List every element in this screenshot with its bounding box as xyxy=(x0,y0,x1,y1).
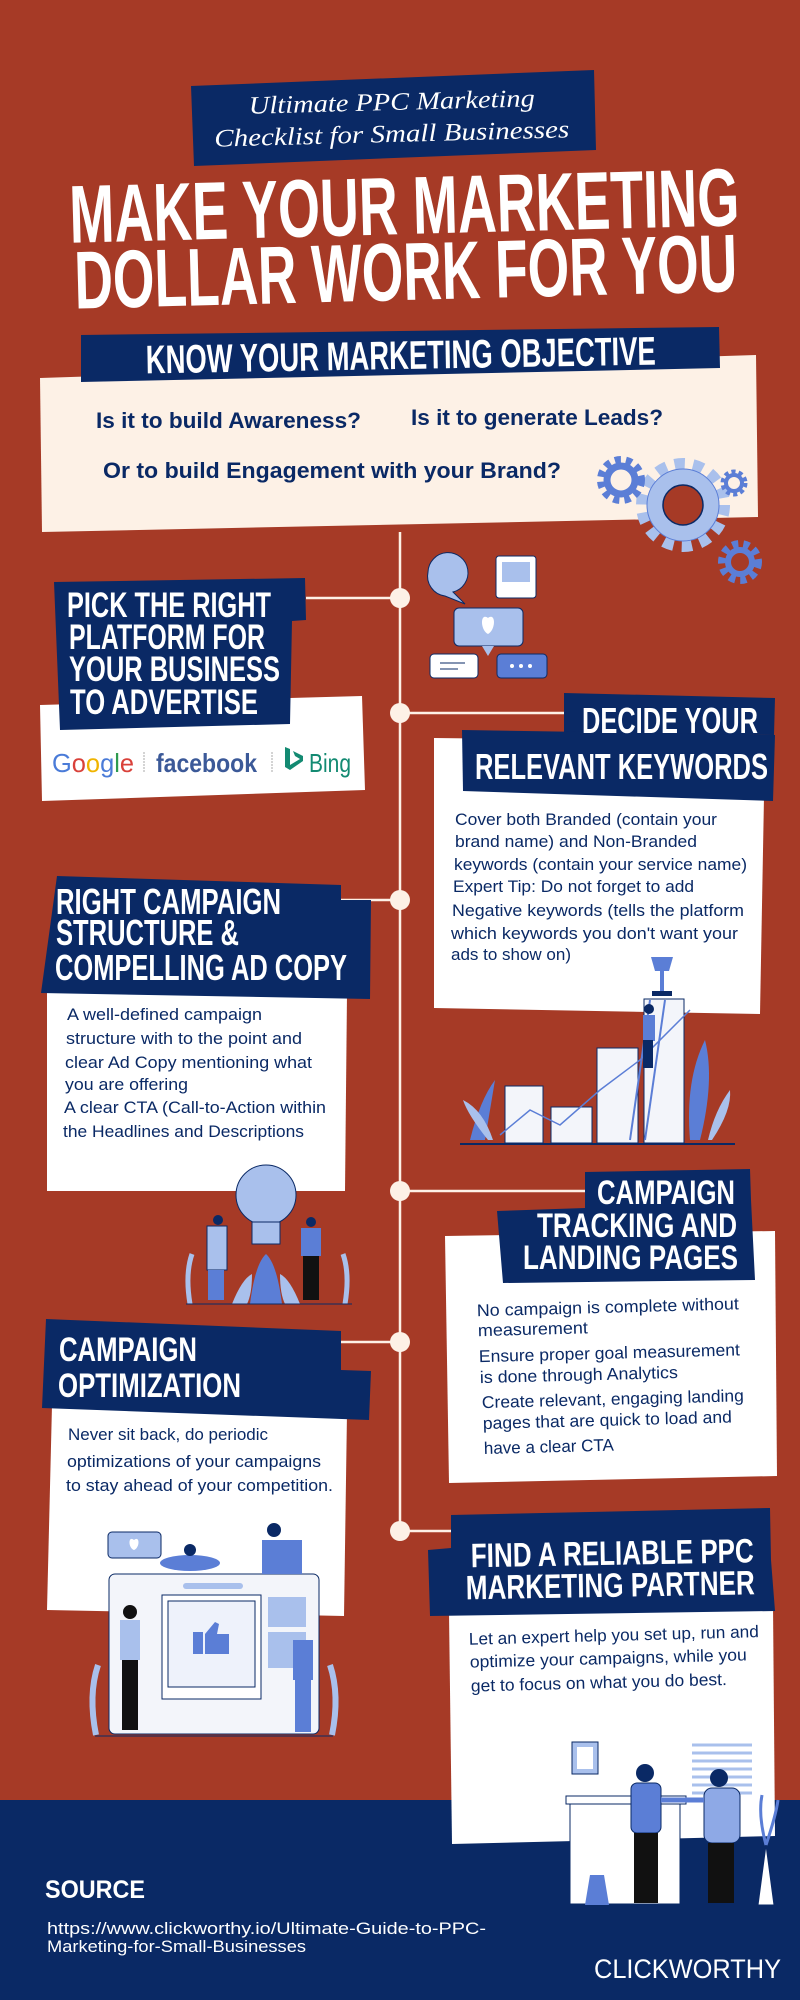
text: tracking xyxy=(477,1294,744,1458)
questions: Is it to build Awareness? xyxy=(96,408,361,433)
heading: right campaign structure: STRUCTURE & xyxy=(56,912,239,953)
heading: pick the right platform: PICK THE RIGHT xyxy=(67,586,271,625)
heading: campaign tracking: LANDING PAGES xyxy=(523,1239,738,1277)
text: campaign structure: clear Ad Copy mentioning what xyxy=(65,1053,312,1072)
panel: campaign structure xyxy=(41,876,371,1191)
source url xyxy=(47,1919,486,1956)
text: keywords: brand name) and Non-Branded xyxy=(455,832,697,851)
text: keywords: which keywords you don't want your xyxy=(450,924,738,943)
text: campaign structure: you are offering xyxy=(65,1075,188,1094)
text: tracking: have a clear CTA xyxy=(484,1436,615,1458)
panel: decide your relevant keywords xyxy=(434,693,775,1014)
text: tracking: measurement xyxy=(478,1318,588,1340)
source heading: SOURCE xyxy=(45,1876,145,1904)
questions: Is it to generate Leads? xyxy=(411,405,663,430)
panel: campaign tracking and landing pages xyxy=(445,1169,777,1483)
icon: gears xyxy=(601,460,758,580)
timeline xyxy=(306,532,585,1541)
heading: pick the right platform: PLATFORM FOR xyxy=(69,618,265,657)
text: campaign structure: the Headlines and Descriptions xyxy=(63,1122,304,1141)
icon: social chat bubbles xyxy=(428,553,547,678)
questions: Or to build Engagement with your Brand? xyxy=(103,458,561,483)
questions xyxy=(96,405,663,483)
source url: https://www.clickworthy.io/Ultimate-Guide-to-PPC- xyxy=(47,1919,486,1938)
text: optimization: Never sit back, do periodic xyxy=(68,1425,268,1444)
heading: pick the right platform: YOUR BUSINESS xyxy=(69,650,280,689)
text: partner xyxy=(469,1622,759,1696)
text: keywords: Cover both Branded (contain your xyxy=(455,810,717,829)
heading: find a reliable partner xyxy=(428,1508,775,1616)
text: partner: optimize your campaigns, while you xyxy=(470,1645,747,1672)
text: tracking: Ensure proper goal measurement xyxy=(479,1340,740,1366)
text: campaign structure: structure with to the point and xyxy=(66,1029,302,1048)
main title xyxy=(68,152,740,327)
logos: google facebook bing: Google xyxy=(52,748,134,778)
illustration: lightbulb with people xyxy=(186,1165,352,1304)
heading: right campaign structure xyxy=(41,876,371,999)
subtitle banner: Checklist for Small Businesses xyxy=(214,116,570,153)
text: keywords: Expert Tip: Do not forget to add xyxy=(453,877,694,896)
text: tracking: No campaign is complete without xyxy=(477,1294,739,1320)
subtitle banner xyxy=(191,70,596,166)
heading: campaign tracking: TRACKING AND xyxy=(537,1207,737,1245)
illustration: social media post with people xyxy=(92,1523,336,1736)
text: partner: get to focus on what you do best. xyxy=(471,1670,727,1696)
heading: right campaign structure: RIGHT CAMPAIGN xyxy=(56,881,281,922)
text: campaign structure: A well-defined campaign xyxy=(67,1005,262,1024)
text: campaign structure xyxy=(63,1005,326,1141)
logos: google facebook bing: Bing xyxy=(309,748,351,778)
subtitle banner: Ultimate PPC Marketing xyxy=(248,85,535,120)
panel: marketing objective xyxy=(40,327,758,532)
panel: campaign optimization xyxy=(42,1319,371,1616)
text: tracking: is done through Analytics xyxy=(480,1363,678,1387)
panel: pick the right platform xyxy=(40,578,365,801)
text: optimization: to stay ahead of your competition. xyxy=(66,1476,333,1495)
footer band xyxy=(0,1800,800,2000)
text: optimization: optimizations of your campaigns xyxy=(67,1452,321,1471)
heading: campaign optimization: CAMPAIGN xyxy=(59,1331,197,1369)
illustration: handshake xyxy=(562,1742,786,1906)
text: campaign structure: A clear CTA (Call-to-Action within xyxy=(64,1098,326,1117)
heading: decide your relevant keywords xyxy=(462,693,775,801)
logos: google facebook bing: facebook xyxy=(156,748,257,778)
text: keywords: keywords (contain your service name) xyxy=(454,855,747,874)
source url: Marketing-for-Small-Businesses xyxy=(47,1937,306,1956)
heading: pick the right platform: TO ADVERTISE xyxy=(70,683,258,722)
text: keywords xyxy=(450,810,747,964)
text: tracking: Create relevant, engaging landing xyxy=(482,1386,744,1412)
heading: campaign tracking xyxy=(497,1169,755,1283)
heading: campaign optimization xyxy=(42,1319,371,1420)
text: keywords: ads to show on) xyxy=(451,945,571,964)
logo: clickworthy: CLICKWORTHY xyxy=(594,1954,781,1984)
text: optimization xyxy=(66,1425,333,1495)
logos: google facebook bing xyxy=(52,747,351,778)
text: keywords: Negative keywords (tells the platform xyxy=(452,901,744,920)
heading: right campaign structure: COMPELLING AD COPY xyxy=(55,947,347,988)
illustration: bar chart with ladder xyxy=(460,957,735,1144)
panel: find a reliable ppc partner xyxy=(428,1508,775,1844)
text: partner: Let an expert help you set up, run and xyxy=(469,1622,759,1649)
heading: campaign tracking: CAMPAIGN xyxy=(597,1174,735,1212)
heading: campaign optimization: OPTIMIZATION xyxy=(58,1367,241,1405)
text: tracking: pages that are quick to load and xyxy=(483,1408,732,1433)
heading: pick the right platform xyxy=(54,578,306,730)
